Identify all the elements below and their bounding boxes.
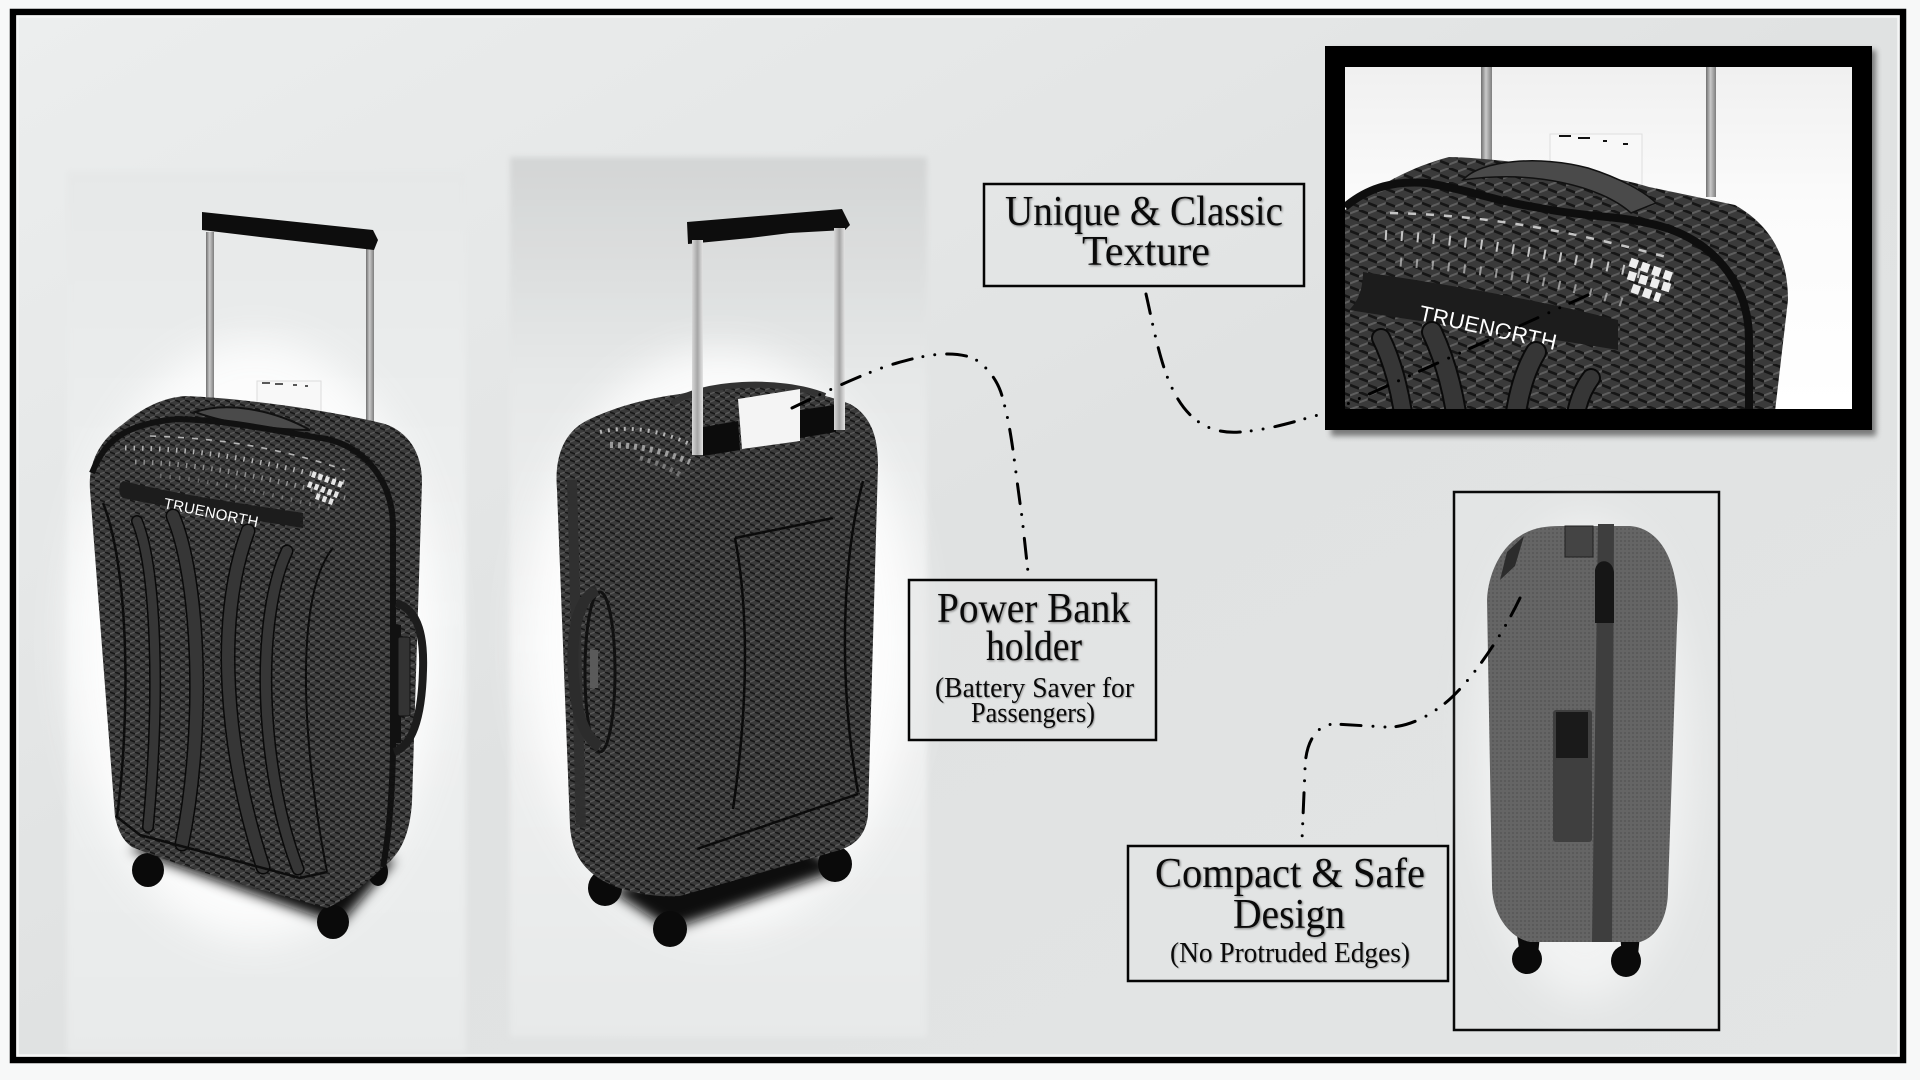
callout: texture	[984, 184, 1304, 286]
leader line in close-up	[1345, 295, 1588, 405]
panel frame	[1454, 492, 1719, 1030]
poles	[1481, 67, 1716, 197]
callout: texture: Texture	[1082, 229, 1210, 275]
left rim	[572, 480, 581, 827]
close-up picture	[1345, 67, 1852, 420]
pull handle	[202, 212, 378, 250]
callout: power bank: (Battery Saver for	[935, 673, 1135, 704]
highlights on shell	[125, 436, 350, 510]
callout: compact design: (No Protruded Edges)	[1170, 938, 1410, 969]
callout: compact design	[1128, 846, 1448, 981]
top grip	[1565, 526, 1593, 557]
suitcase: front view	[70, 212, 440, 940]
floor shadow	[610, 840, 840, 930]
power bank in holder	[738, 389, 800, 449]
shell	[1345, 157, 1788, 420]
frame shadow	[1331, 50, 1876, 436]
black frame	[1325, 46, 1872, 430]
callout: power bank: Power Bank	[937, 586, 1130, 632]
callout: compact design: Design	[1233, 892, 1345, 938]
floor shadow	[130, 820, 395, 925]
glow	[525, 350, 915, 930]
leader: power bank	[792, 354, 1028, 572]
side grip	[1553, 710, 1592, 842]
brand name: TRUENORTH	[162, 495, 262, 531]
power bank	[257, 381, 321, 423]
side grip	[393, 603, 423, 752]
backdrop behind rear view	[510, 157, 927, 1037]
inset: texture close-up	[1325, 46, 1876, 436]
pull handle	[687, 209, 850, 244]
highlights	[1385, 213, 1675, 305]
pull handle poles	[206, 232, 374, 425]
leader: compact design	[1302, 598, 1520, 840]
leader: texture	[1146, 294, 1325, 432]
suitcase: rear view	[525, 209, 915, 947]
wheels	[588, 846, 852, 947]
dark top detail	[1500, 536, 1524, 580]
callout: power bank: Passengers)	[971, 698, 1095, 729]
glow	[70, 340, 440, 940]
callout: power bank: holder	[986, 624, 1082, 670]
brand name: TRUENORTH	[1417, 300, 1559, 355]
rim	[92, 419, 393, 867]
shell	[557, 387, 878, 896]
grooves	[1381, 332, 1591, 420]
wheels	[132, 853, 388, 939]
shell	[90, 396, 422, 908]
side glow	[1480, 520, 1690, 1000]
brand strip	[119, 481, 303, 528]
power bank	[1550, 134, 1642, 190]
callout: power bank	[909, 580, 1156, 740]
suitcase: side view	[1487, 524, 1678, 977]
front grooves	[103, 503, 333, 878]
center band	[1592, 524, 1614, 942]
black rim section	[1595, 561, 1614, 623]
pull handle poles	[692, 228, 845, 455]
top recess sockets	[703, 405, 836, 456]
backdrop behind front view	[67, 171, 466, 1053]
rear panel seams	[697, 481, 863, 849]
top grip	[195, 407, 310, 430]
side grip	[573, 590, 615, 752]
front edge highlights	[600, 429, 692, 476]
wheels	[1512, 935, 1641, 977]
shell	[1487, 526, 1678, 942]
brand strip	[1349, 272, 1618, 350]
top grip	[1463, 161, 1656, 213]
top grip	[672, 385, 825, 404]
callout: compact design: Compact & Safe	[1155, 851, 1425, 897]
callout: texture: Unique & Classic	[1005, 189, 1283, 235]
rim	[1345, 182, 1749, 420]
side view panel	[1454, 492, 1719, 1030]
